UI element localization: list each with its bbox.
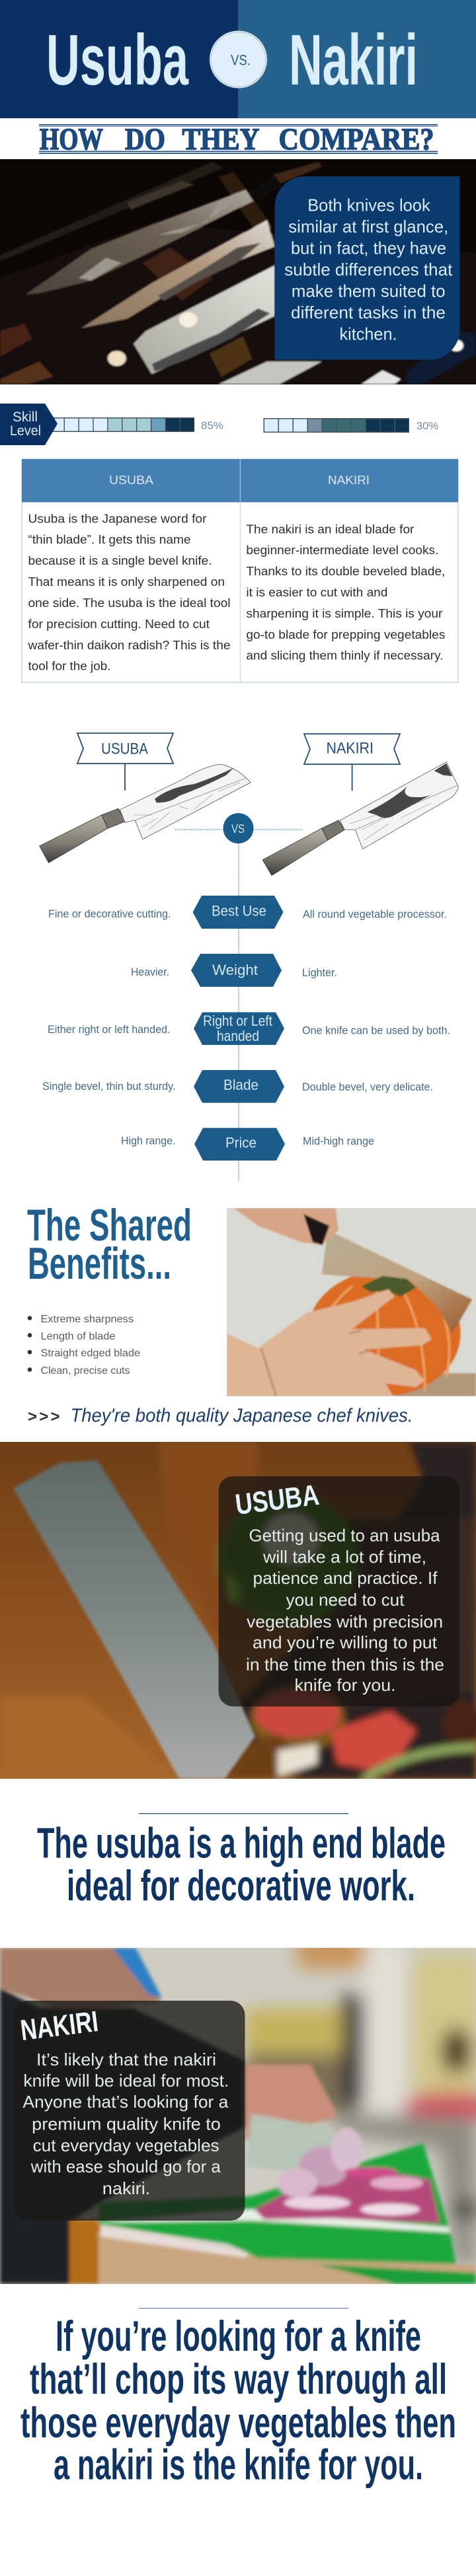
banner: nakiri: NAKIRI [327,740,374,758]
callout: both knives look similar: subtle differences that [284,260,453,279]
benefits list: Length of blade [41,1331,116,1342]
callout: both knives look similar: similar at first glance, [288,217,448,236]
table text: usuba: for precision cutting. Need to cut [28,617,210,631]
callout text: nakiri: nakiri. [102,2178,150,2198]
illustration: nakiri knife [262,762,458,875]
table text: usuba: one side. The usuba is the ideal tool [28,596,230,610]
row: right or left handed: handed [217,1028,259,1044]
heading: how do they compare: DO [125,122,165,157]
timeline spine [238,843,239,1181]
skill level tag: Level [10,423,41,439]
row: best use: Fine or decorative cutting. [48,908,171,920]
banner: usuba: USUBA [101,740,148,758]
table text: nakiri [246,522,445,662]
skill bar: nakiri [263,418,409,433]
callout text: nakiri: Anyone that’s looking for a [22,2092,229,2112]
table text: nakiri: Thanks to its double beveled blade, [246,564,445,578]
callout text: usuba: patience and practice. If [253,1568,438,1588]
table text: usuba: tool for the job. [28,659,111,673]
benefits list: Clean, precise cuts [41,1365,130,1377]
row: best use: All round vegetable processor. [303,909,447,921]
callout: both knives look similar [275,176,460,360]
table header: nakiri: NAKIRI [328,473,370,487]
banner: usuba [77,733,173,791]
table text: usuba: wafer-thin daikon radish? This is the [27,638,230,652]
heading: the shared benefits: Benefits... [28,1238,171,1289]
callout text: nakiri: premium quality knife to [32,2114,221,2134]
takeaway: nakiri [20,2308,456,2489]
vs badge: VS. [231,52,251,69]
table text: nakiri: go-to blade for prepping vegetables [246,627,445,641]
row: best use: Best Use [212,903,266,919]
row: weight: Weight [212,962,258,978]
row: price: Price [225,1135,257,1151]
skill bar: usuba [50,417,194,432]
callout text: nakiri: with ease should go for a [30,2157,221,2176]
photo: cutting a pumpkin [227,1208,476,1396]
header banner [0,0,476,118]
row: blade: Double bevel, very delicate. [302,1081,433,1093]
table text: usuba [27,511,230,673]
callout: nakiri [14,2001,245,2221]
row: right or left handed: Right or Left [203,1013,272,1029]
table text: nakiri: and slicing them thinly if necessary. [246,649,443,662]
callout: both knives look similar: make them suited to [292,281,446,301]
callout text: usuba: you need to cut [286,1590,405,1610]
photo: row of knives [0,159,476,384]
table text: usuba: That means it is only sharpened on [28,575,225,589]
callout text: usuba: Getting used to an usuba [249,1526,440,1546]
benefits list: Extreme sharpness [41,1314,134,1325]
vs node: VS [231,822,245,836]
skill level tag [0,404,58,445]
photo: usuba on a cutting board [0,1442,476,1780]
heading: how do they compare: COMPARE? [279,122,434,157]
table text: nakiri: sharpening it is simple. This is your [246,606,442,620]
heading: how do they compare: THEY [182,122,260,157]
tagline: They're both quality Japanese chef knives. [70,1406,413,1427]
illustration: usuba knife [40,764,251,863]
tagline: >>> [28,1408,60,1426]
title: Usuba: Usuba [46,20,189,100]
label: 30%: 30% [416,421,438,432]
row: price: High range. [121,1135,176,1147]
table text: nakiri: it is easier to cut with and [246,585,387,599]
heading: how do they compare [39,122,438,157]
banner: nakiri [304,734,400,791]
table text: usuba: “thin blade”. It gets this name [28,532,190,546]
callout text: nakiri: It’s likely that the nakiri [36,2050,216,2069]
row: right or left handed: One knife can be used by both. [302,1025,450,1037]
row: right or left handed: Either right or left handed. [48,1024,171,1036]
callout text: nakiri: cut everyday vegetables [33,2135,219,2155]
callout text: nakiri [22,2050,229,2198]
callout text: nakiri: knife will be ideal for most. [23,2071,229,2091]
table text: usuba: because it is a single bevel knife. [28,554,212,567]
table text: nakiri: beginner-intermediate level cooks. [246,543,438,557]
callout: both knives look similar: kitchen. [340,324,397,344]
heading: the shared benefits [27,1200,192,1289]
row: blade: Single bevel, thin but sturdy. [42,1081,176,1092]
callout text: usuba: vegetables with precision [247,1612,443,1631]
label: 85%: 85% [201,420,223,431]
benefits list: Straight edged blade [41,1348,140,1359]
callout text: usuba: will take a lot of time, [262,1547,426,1567]
benefits list [28,1314,140,1377]
callout heading: usuba: USUBA [233,1479,321,1521]
row: right or left handed [48,1012,450,1045]
comparison table [22,459,458,682]
skill level tag: Skill [13,410,38,425]
callout: usuba [219,1476,459,1707]
callout text: usuba: in the time then this is the [246,1655,444,1674]
callout: both knives look similar: Both knives look [307,196,431,215]
callout: both knives look similar: different tasks in the [291,303,446,322]
row: price: Mid-high range [303,1135,374,1147]
takeaway: usuba [37,1813,446,1910]
photo: chopping onions [0,1935,476,2284]
callout text: usuba [246,1526,444,1695]
table text: usuba: Usuba is the Japanese word for [28,511,206,525]
row: best use [48,896,447,929]
callout text: usuba: knife for you. [295,1675,395,1695]
table text: nakiri: The nakiri is an ideal blade for [246,522,414,536]
vs badge [210,30,267,89]
vs node [175,813,303,843]
heading: the shared benefits: The Shared [27,1200,192,1250]
row: blade [42,1070,433,1103]
table header: usuba: USUBA [109,473,154,487]
callout: both knives look similar: but in fact, they have [291,238,446,258]
callout text: usuba: and you’re willing to put [253,1633,438,1653]
row: weight: Lighter. [302,967,337,979]
row: price [121,1128,374,1161]
row: weight: Heavier. [131,966,169,978]
callout heading: nakiri: NAKIRI [19,2005,100,2047]
row: blade: Blade [223,1077,258,1093]
row: weight [131,954,337,987]
heading: how do they compare: HOW [40,122,103,157]
